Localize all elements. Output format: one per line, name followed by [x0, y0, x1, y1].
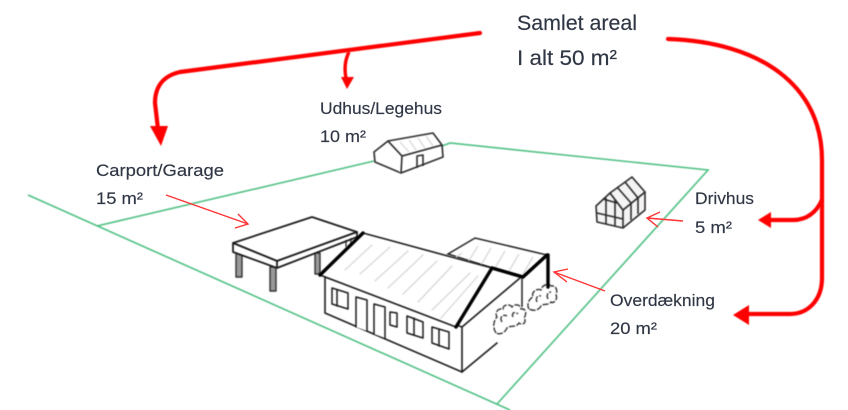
arrow: total to greenhouse [758, 200, 822, 228]
windows and doors [332, 288, 449, 349]
value: covered terrace: 20 m² [610, 319, 657, 338]
arrow: total to carport [150, 33, 480, 146]
arrow: total to covered terrace [668, 39, 822, 325]
house roof [320, 233, 492, 327]
icon: main house [320, 233, 548, 372]
label: greenhouse: Drivhus [695, 189, 754, 208]
icon: carport [233, 217, 357, 291]
icon: shed [374, 133, 443, 173]
label: covered terrace: Overdækning [610, 291, 715, 310]
value: greenhouse: 5 m² [695, 218, 732, 237]
plot boundary [28, 143, 708, 410]
arrow: carport pointer [166, 195, 248, 228]
label: carport: Carport/Garage [96, 161, 224, 180]
icon: bushes [494, 285, 557, 334]
arrow: terrace pointer [554, 269, 605, 291]
icon: greenhouse [596, 177, 645, 228]
icon: covered terrace [448, 238, 547, 307]
arrow: greenhouse pointer [647, 212, 683, 227]
house walls [325, 277, 520, 372]
arrow: total to shed [341, 52, 354, 89]
value: carport: 15 m² [96, 189, 143, 208]
thick roof edges [320, 233, 548, 327]
total area value: I alt 50 m² [517, 47, 617, 70]
label: shed: Udhus/Legehus [320, 99, 442, 118]
heading: total area: Samlet areal [517, 12, 637, 35]
roof hatching [345, 245, 478, 318]
value: shed: 10 m² [320, 127, 366, 146]
